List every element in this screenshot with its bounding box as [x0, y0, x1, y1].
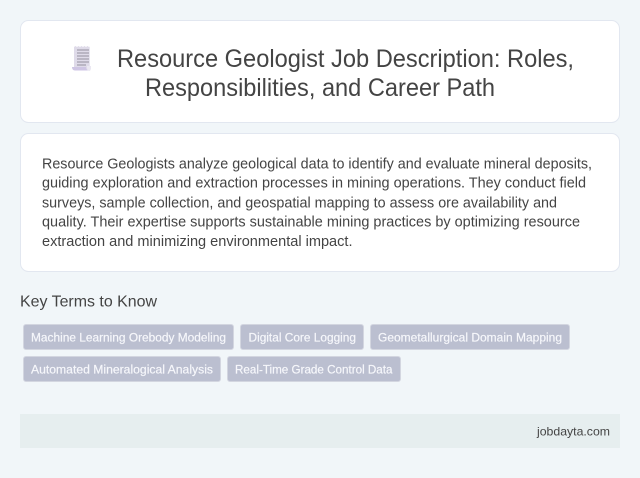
- title: Responsibilities, and Career Path: [145, 74, 495, 102]
- chip: digital core logging: Digital Core Logging: [248, 331, 356, 345]
- chip: geometallurgical domain mapping: Geometallurgical Domain Mapping: [378, 331, 562, 345]
- chip: machine learning orebody modeling: Machine Learning Orebody Modeling: [31, 331, 226, 345]
- title: [117, 45, 574, 102]
- description text: quality. Their expertise supports sustainable mining practices by optimizing resource: [42, 215, 580, 231]
- chip: real-time grade control data: [228, 356, 400, 382]
- description text: surveys, sample collection, and geospatial mapping to assess ore availability and: [42, 195, 557, 211]
- footer site name: jobdayta.com: [536, 424, 610, 438]
- panel: header card: [20, 20, 620, 122]
- chip: digital core logging: [240, 324, 364, 350]
- description text: extraction and minimizing environmental impact.: [42, 234, 352, 250]
- description text: [42, 156, 592, 250]
- footer bar: [20, 414, 620, 448]
- chip: geometallurgical domain mapping: [370, 324, 570, 350]
- chip: machine learning orebody modeling: [24, 324, 234, 350]
- chip: automated mineralogical analysis: [24, 356, 220, 382]
- title: Resource Geologist Job Description: Roles,: [117, 45, 574, 73]
- heading: key terms: Key Terms to Know: [20, 294, 157, 311]
- panel: description card: [20, 134, 620, 272]
- chip: automated mineralogical analysis: Automated Mineralogical Analysis: [31, 363, 213, 377]
- chip: real-time grade control data: Real-Time Grade Control Data: [235, 363, 393, 377]
- icon: document scroll: [72, 46, 91, 71]
- description text: Resource Geologists analyze geological data to identify and evaluate mineral deposits,: [42, 156, 592, 172]
- description text: guiding exploration and extraction processes in mining operations. They conduct field: [42, 176, 586, 192]
